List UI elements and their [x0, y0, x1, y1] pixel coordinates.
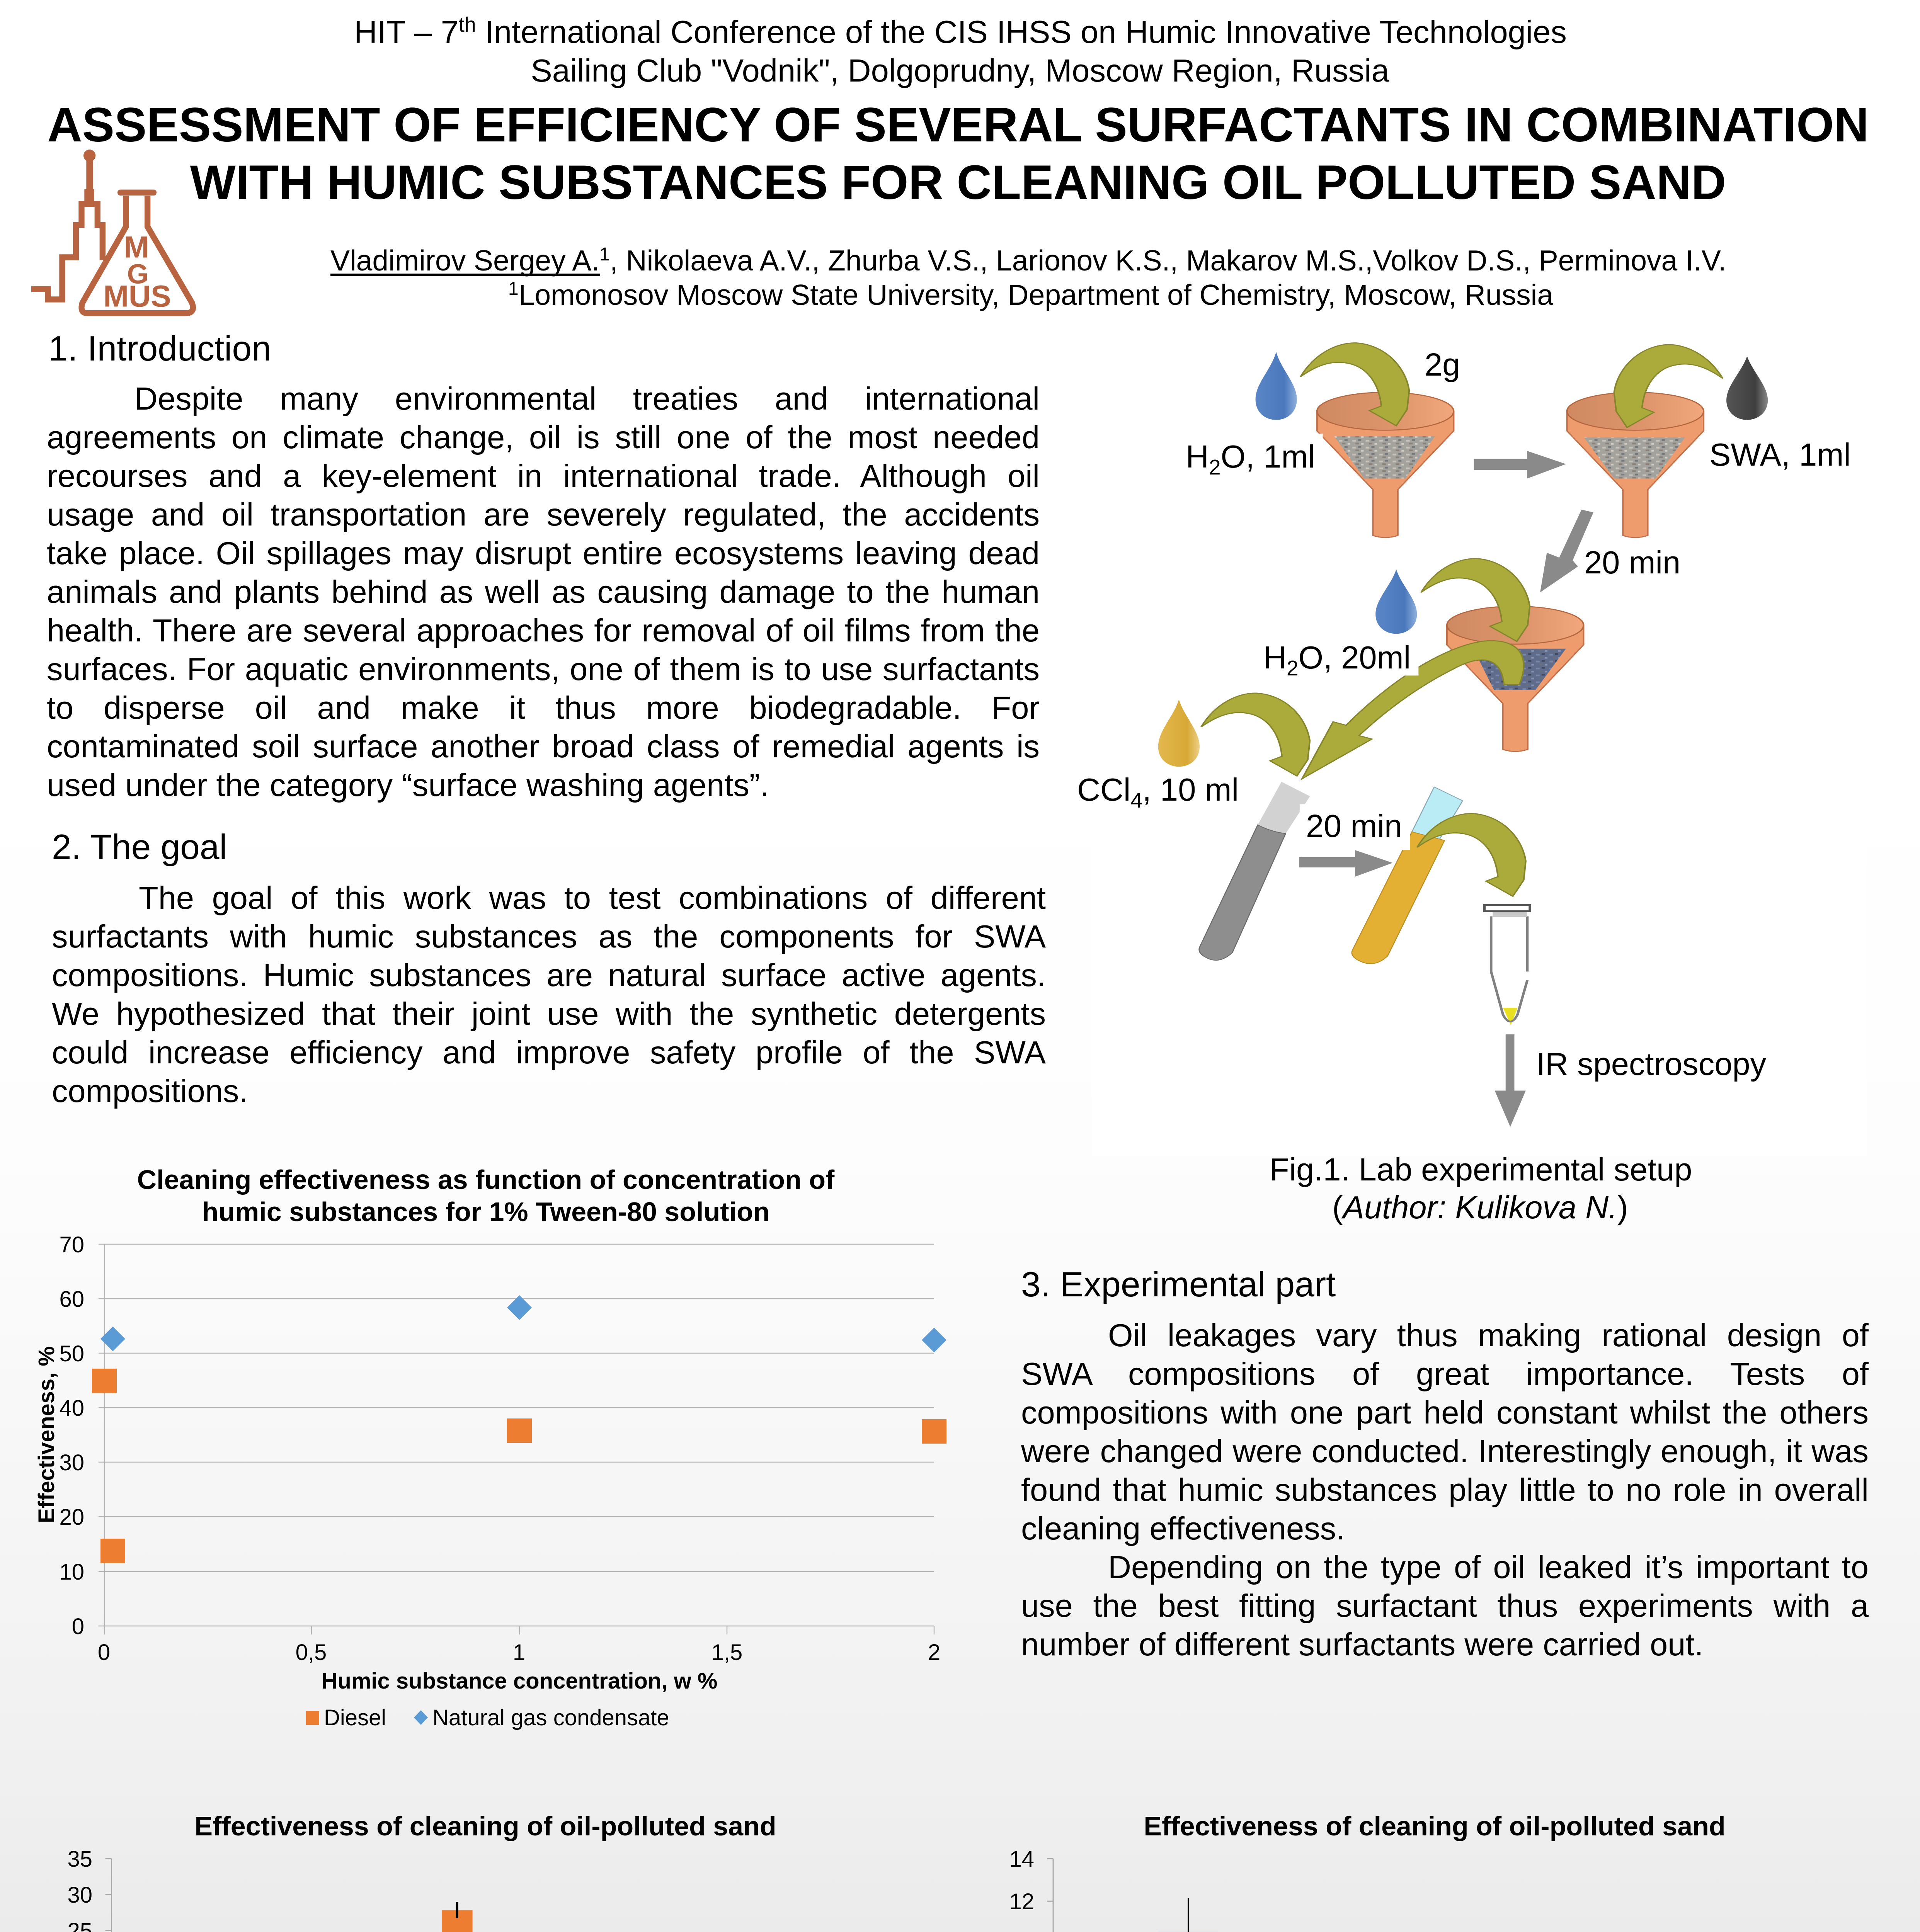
arrow: long arrow from funnel 3 to tube [1302, 641, 1524, 779]
text block: the goal: The goal of this work was to test combinations of different [139, 880, 1046, 916]
authors and affiliation: Lomonosov Moscow State University, Department of Chemistry, Moscow, Russia [519, 279, 1553, 311]
text block: experimental part: use the best fitting surfactant thus experiments with a [1021, 1588, 1869, 1624]
text block: experimental part: SWA compositions of great importance. Tests of [1021, 1356, 1869, 1392]
figure caption [1270, 1151, 1692, 1225]
chart title: Effectiveness of cleaning of oil-polluted sand [1144, 1811, 1726, 1841]
icon: water drop 2 [1375, 569, 1417, 634]
icon: dark SWA drop [1726, 356, 1768, 420]
y axis tick labels: 50 [59, 1341, 84, 1366]
arrow: water into funnel 3 [1421, 559, 1530, 641]
y axis tick labels: 60 [59, 1287, 84, 1312]
text block: introduction: Despite many environmental treaties and international [134, 381, 1040, 417]
series: natural gas condensate [100, 1295, 946, 1352]
funnels and drops, upper part [1158, 343, 1861, 779]
figure labels: O, 20ml [1299, 639, 1411, 675]
text block: introduction: usage and oil transportation are severely regulated, the accidents [47, 497, 1040, 532]
text block: the goal [52, 879, 1046, 1111]
arrow: SWA into funnel 2 [1614, 345, 1723, 427]
y axis tick labels: 14 [1009, 1847, 1034, 1872]
error bars [1128, 1898, 1815, 1932]
text block: experimental part: Depending on the type of oil leaked it’s important to [1108, 1549, 1869, 1585]
arrow: grey right between tubes [1299, 850, 1393, 877]
y axis title: Effectiveness, % [34, 1346, 59, 1523]
text block: the goal: We hypothesized that their joint use with the synthetic detergents [52, 996, 1046, 1032]
chart title: Effectiveness of cleaning of oil-polluted sand [194, 1811, 776, 1841]
text block: introduction [47, 379, 1040, 804]
text block: the goal: surfactants with humic substances as the components for SWA [52, 918, 1046, 954]
text block: introduction: recourses and a key-element in international trade. Although oil [47, 458, 1040, 494]
icon: water drop 1 [1256, 352, 1297, 420]
x axis tick labels: 1 [513, 1640, 525, 1665]
text block: introduction: used under the category “surface washing agents”. [47, 767, 769, 803]
figure labels: 2 [1209, 455, 1221, 479]
y axis tick labels: 40 [59, 1396, 84, 1421]
figure caption: Fig.1. Lab experimental setup [1270, 1151, 1692, 1187]
x axis tick labels: 0 [98, 1640, 110, 1665]
figure labels: O, 1ml [1221, 439, 1315, 474]
conference header: HIT – 7 [354, 14, 459, 50]
arrow: olive from tube to vial [1417, 813, 1526, 896]
text block: introduction: surfaces. For aquatic environments, one of them is to use surfactants [47, 651, 1040, 687]
figure labels: 2 [1287, 656, 1299, 680]
y axis tick labels [1009, 1847, 1034, 1932]
figure labels: H [1263, 639, 1287, 675]
icon: funnel 3 with wet sand [1447, 606, 1583, 752]
text block: experimental part: Oil leakages vary thus making rational design of [1108, 1317, 1869, 1353]
heading: 2. The goal: 2. The goal [52, 828, 227, 867]
x axis tick labels: 2 [928, 1640, 940, 1665]
text block: the goal: compositions. Humic substances are natural surface active agents. [52, 957, 1046, 993]
figure labels: 2g [1425, 347, 1460, 383]
x axis title: Humic substance concentration, w % [322, 1668, 717, 1694]
white label backgrounds [1183, 353, 1861, 675]
conference header: th [459, 13, 476, 36]
icon: yellow test tube [1352, 787, 1463, 964]
chart title: Cleaning effectiveness as function of concentration of [137, 1165, 835, 1195]
authors and affiliation: , Nikolaeva A.V., Zhurba V.S., Larionov K.S., Makarov M.S.,Volkov D.S., Perminova I.V. [610, 244, 1726, 277]
icon: funnel 1 with sand [1317, 392, 1454, 537]
legend: Diesel [324, 1705, 386, 1730]
axes [106, 1859, 940, 1932]
chart: bar chart of surfactant mixtures [34, 1811, 940, 1932]
y axis tick labels: 30 [59, 1450, 84, 1475]
series: 100 ml without column [166, 1910, 887, 1932]
text block: experimental part: compositions with one part held constant whilst the others [1021, 1395, 1869, 1430]
x axis tick labels: 1,5 [711, 1640, 742, 1665]
white label backgrounds [1069, 767, 1410, 850]
y axis tick labels [59, 1232, 84, 1639]
arrow: grey diagonal [1540, 510, 1593, 592]
figure labels: , 10 ml [1142, 772, 1239, 808]
figure labels: 20 min [1306, 808, 1402, 844]
authors and affiliation: Vladimirov Sergey A. [330, 244, 599, 277]
tubes, lower part [1069, 767, 1530, 1127]
y axis tick labels: 12 [1009, 1889, 1034, 1914]
chart: scatter, effectiveness vs humic concentration [34, 1165, 946, 1730]
title: ASSESSMENT OF EFFICIENCY OF SEVERAL SURFACTANTS IN COMBINATION [47, 98, 1869, 152]
authors and affiliation [330, 244, 1726, 311]
icon: funnel 2 with sand [1567, 392, 1704, 537]
y axis tick labels: 35 [67, 1847, 92, 1872]
icon: MGMUS logo [31, 150, 193, 313]
text block: the goal: compositions. [52, 1073, 248, 1109]
arrow: sand into funnel 1 [1300, 343, 1409, 426]
chart title: humic substances for 1% Tween-80 solution [202, 1197, 770, 1227]
axes [1047, 1859, 1889, 1932]
authors and affiliation: 1 [508, 279, 519, 299]
figure labels: SWA, 1ml [1709, 437, 1851, 473]
grid lines [99, 1244, 934, 1634]
text block: introduction: agreements on climate change, oil is still one of the most needed [47, 419, 1040, 455]
y axis tick labels: 70 [59, 1232, 84, 1257]
text block: experimental part: number of different surfactants were carried out. [1021, 1626, 1703, 1662]
series: diesel [92, 1369, 946, 1563]
figure labels: H [1186, 439, 1209, 474]
figure labels: CCl [1077, 772, 1130, 808]
heading: 3. Experimental part: 3. Experimental part [1021, 1265, 1336, 1304]
text block: experimental part [1021, 1316, 1869, 1664]
conference header: Sailing Club "Vodnik", Dolgoprudny, Moscow Region, Russia [531, 53, 1389, 88]
icon: MGMUS logo: M [124, 230, 149, 264]
y axis tick labels: 10 [59, 1560, 84, 1585]
text block: introduction: health. There are several approaches for removal of oil films from the [47, 612, 1040, 648]
title [47, 98, 1869, 209]
x axis tick labels [98, 1640, 940, 1665]
figure labels: 4 [1130, 788, 1142, 812]
icon: microcentrifuge vial [1484, 905, 1530, 1025]
y axis tick labels [60, 1847, 92, 1932]
legend: Natural gas condensate [432, 1705, 669, 1730]
chart: bar chart of single surfactants [982, 1811, 1889, 1932]
figure labels [1077, 347, 1851, 1082]
conference header: International Conference of the CIS IHSS on Humic Innovative Technologies [476, 14, 1567, 50]
y axis tick labels: 20 [59, 1505, 84, 1530]
arrow: grey down to IR [1495, 1034, 1526, 1127]
text block: experimental part: cleaning effectiveness. [1021, 1510, 1345, 1546]
conference header [354, 13, 1567, 88]
chart title [137, 1165, 835, 1227]
text block: introduction: take place. Oil spillages may disrupt entire ecosystems leaving dead [47, 535, 1040, 571]
text block: the goal: could increase efficiency and improve safety profile of the SWA [52, 1034, 1046, 1070]
figure caption: (Author: Kulikova N.) [1332, 1189, 1628, 1225]
icon: MGMUS logo: G [127, 259, 149, 289]
figure labels: 20 min [1584, 544, 1680, 580]
text block: experimental part: found that humic substances play little to no role in overall [1021, 1472, 1869, 1508]
text block: introduction: animals and plants behind as well as causing damage to the human [47, 574, 1040, 610]
text block: introduction: contaminated soil surface another broad class of remedial agents is [47, 728, 1040, 764]
text block: experimental part: were changed were conducted. Interestingly enough, it was [1021, 1433, 1869, 1469]
icon: MGMUS logo: MUS [103, 279, 171, 313]
figure panel: lab experimental setup [1069, 343, 1867, 1156]
authors and affiliation: 1 [599, 244, 610, 265]
icon: yellow CCl4 drop [1158, 699, 1200, 767]
x axis tick labels: 0,5 [296, 1640, 327, 1665]
heading: 1. Introduction: 1. Introduction [48, 329, 271, 368]
legend [306, 1705, 669, 1730]
y axis tick labels: 0 [72, 1614, 84, 1639]
y axis tick labels: 30 [67, 1883, 92, 1908]
text block: introduction: to disperse oil and make it thus more biodegradable. For [47, 690, 1040, 726]
error bars [150, 1902, 902, 1932]
figure labels: IR spectroscopy [1536, 1046, 1767, 1082]
arrow: CCl4 into tube [1201, 693, 1310, 776]
arrow: grey right [1474, 451, 1566, 478]
title: WITH HUMIC SUBSTANCES FOR CLEANING OIL POLLUTED SAND [190, 156, 1726, 209]
icon: grey test tube [1199, 782, 1310, 960]
